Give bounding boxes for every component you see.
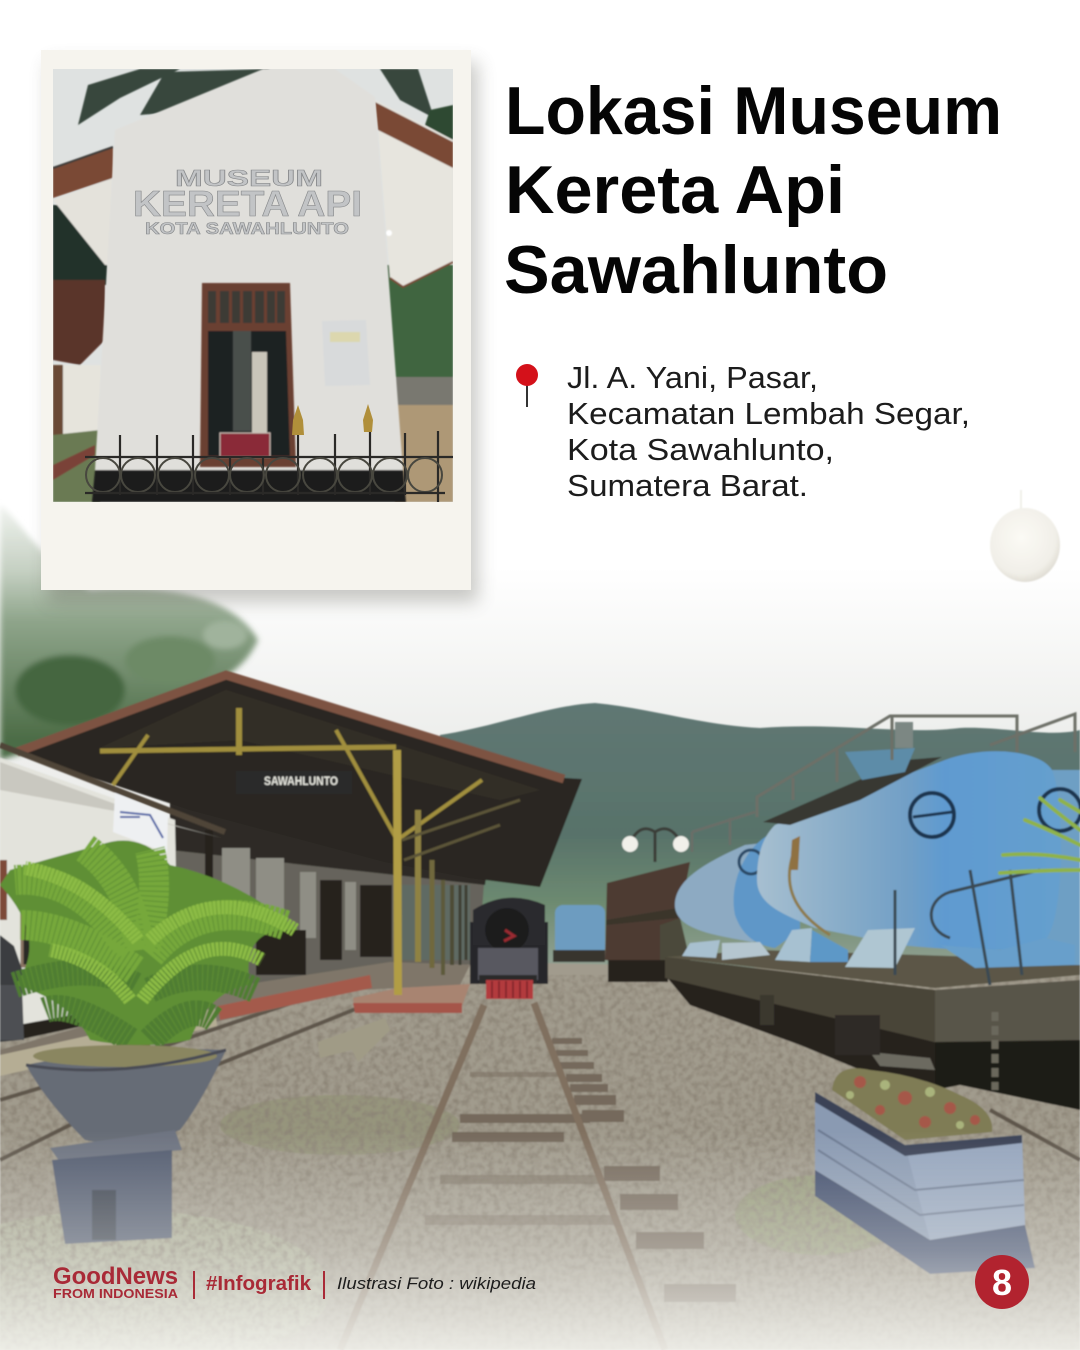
museum sign lettering: KERETA API [133,183,362,224]
footer credits [53,1263,536,1301]
station platform [0,955,470,1076]
station name board: SAWAHLUNTO [264,774,338,788]
deck and undercarriage of flat wagon [665,950,1080,1110]
ground gravel [0,960,1080,1350]
background photo: railway station yard [0,505,1080,1350]
photo credit: Ilustrasi Foto : wikipedia [337,1274,536,1293]
museum sign lettering [135,170,360,234]
title: Lokasi Museum [505,73,1002,149]
page number badge: 8 [992,1262,1012,1303]
bottom white fade [0,1130,1080,1350]
steam locomotive [470,898,548,999]
cradle supports [682,928,1075,968]
person standing [0,935,24,1042]
lamp post [622,829,689,862]
palm leaves [78,69,434,125]
white gate tower [92,69,406,502]
museum door [200,283,296,467]
title [504,73,1002,308]
tank walkway dome and railings [757,714,1075,985]
planter with red shrubs [815,1068,1035,1274]
polaroid photo card [41,50,478,602]
plant pot and pedestal [26,1045,226,1244]
left roof and annex [53,205,108,285]
title: Sawahlunto [504,232,888,308]
side tracks [0,1000,1080,1160]
palm at right edge [1000,798,1080,873]
museum photo [53,69,453,502]
station roof [15,672,582,887]
balloon lamp decoration [990,490,1060,582]
roof posts and braces [100,708,520,995]
station back wall [170,790,490,990]
museum sign lettering: MUSEUM [175,165,323,191]
far blue wagons [553,905,605,962]
iron fence [85,425,453,502]
address text: Jl. A. Yani, Pasar, [567,360,818,395]
main railway ties and rails [340,1003,736,1350]
museum sign lettering: KOTA SAWAHLUNTO [145,219,349,238]
address text [567,360,970,503]
address text: Sumatera Barat. [567,468,808,503]
large blue tank [757,751,1080,965]
grey stone marker [318,1018,390,1062]
blue white wall sign [113,793,168,853]
white station building [0,745,225,1040]
gold finials [292,404,373,435]
GoodNews logo: FROM INDONESIA [53,1286,179,1301]
brown freight wagon [605,862,690,982]
address text: Kota Sawahlunto, [567,432,834,467]
card paper [41,50,471,590]
icon: map pin [516,364,538,407]
GoodNews logo: GoodNews [53,1263,178,1290]
right greenery fence and ground [385,265,453,377]
page number badge [975,1255,1029,1309]
hashtag: #Infografik [206,1273,312,1295]
card shadow [48,62,478,602]
trees at left [0,505,258,760]
hashtag [193,1271,325,1299]
palm plant [0,840,298,1065]
right roof [375,100,453,287]
address text: Kecamatan Lembah Segar, [567,396,970,431]
title: Kereta Api [505,152,845,228]
second blue tank [675,812,800,948]
station name board [236,771,352,794]
wall plaque [330,332,360,342]
hill behind the yard [440,703,1080,985]
